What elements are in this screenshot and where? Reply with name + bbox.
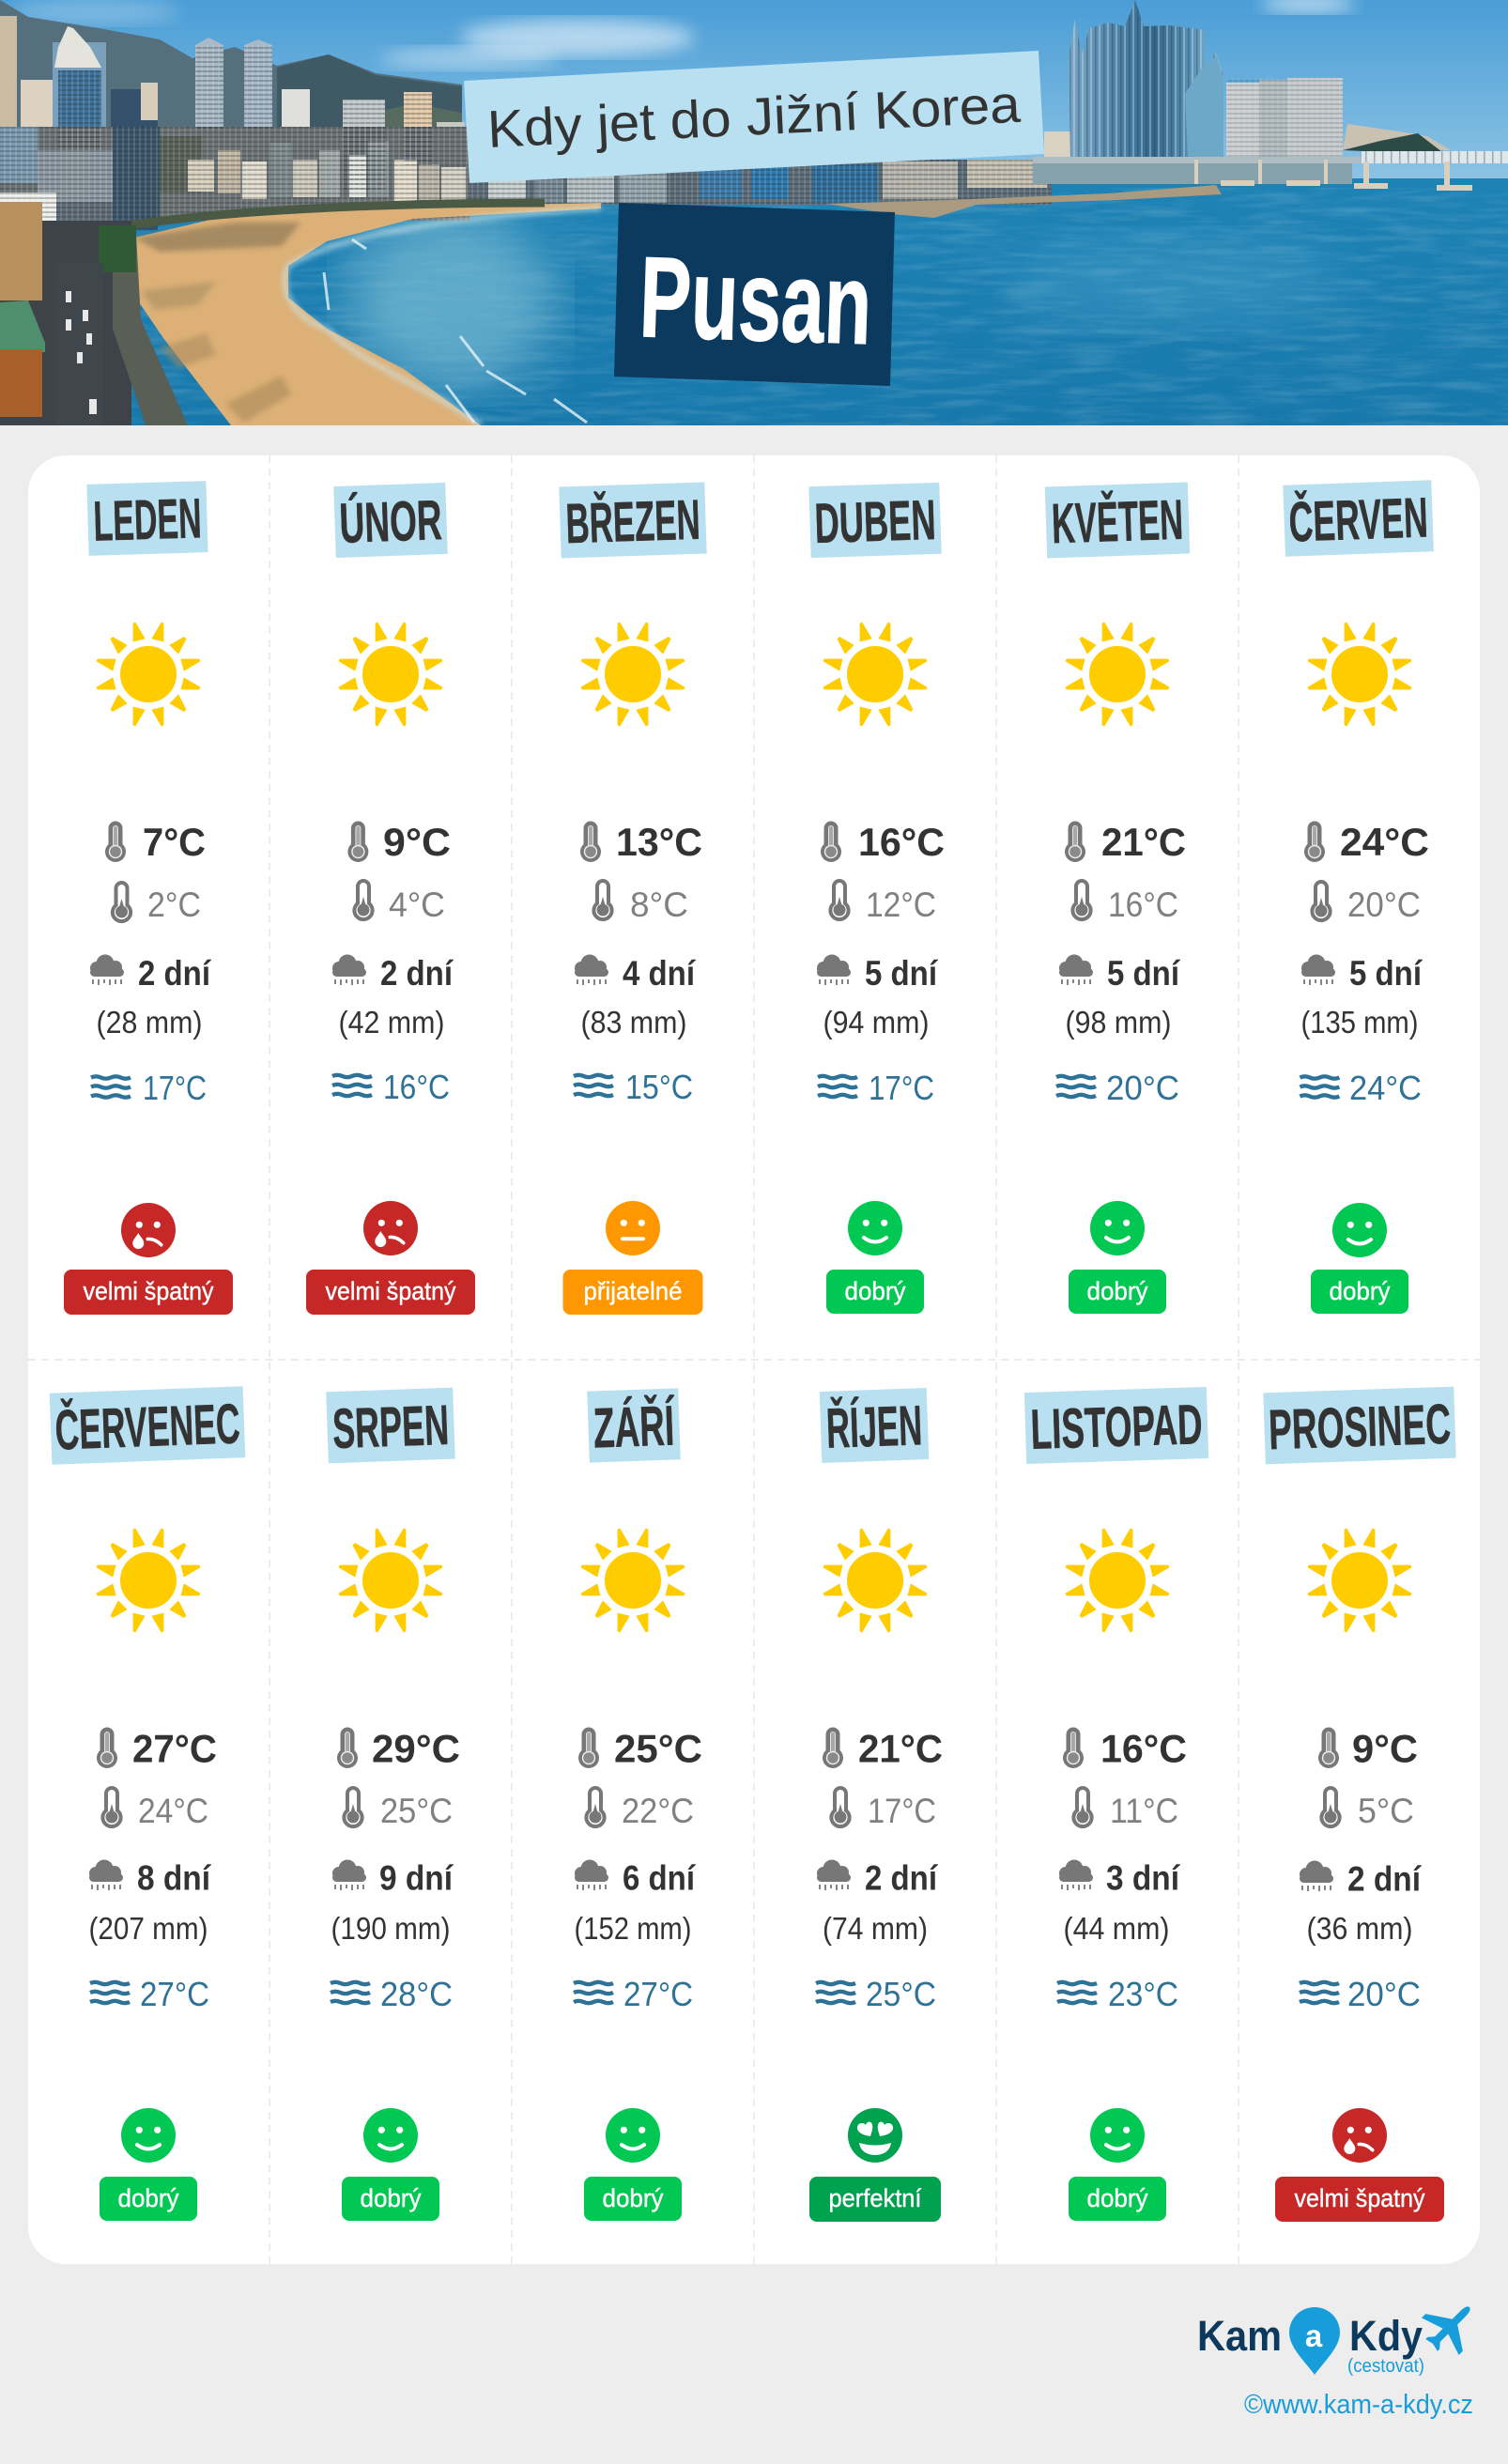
month: listopad	[1024, 1387, 1208, 2221]
icon: sun	[1308, 623, 1411, 726]
max temperature	[97, 1726, 217, 1771]
icon: rating face	[848, 2108, 902, 2163]
rating badge	[809, 2177, 941, 2222]
sea temperature	[331, 1975, 453, 2013]
min temperature: 11°C	[1110, 1792, 1178, 1830]
min temperature: 22°C	[622, 1792, 694, 1830]
min temperature	[586, 1788, 694, 1830]
rating badge: velmi špatný	[1294, 2184, 1425, 2212]
sea temperature	[818, 1069, 934, 1107]
rainy days	[1301, 954, 1423, 993]
subtitle ribbon: Kdy jet do Jižní Korea	[486, 74, 1023, 159]
max temperature: 29°C	[372, 1726, 460, 1771]
sea temperature: 20°C	[1347, 1975, 1421, 2013]
rainy days	[1059, 954, 1181, 993]
website credit: ©www.kam-a-kdy.cz	[1244, 2390, 1473, 2420]
month: únor	[306, 483, 475, 1315]
rating badge	[563, 1270, 702, 1315]
month label: BŘEZEN	[565, 488, 701, 555]
max temperature	[821, 820, 945, 864]
month label: ČERVENEC	[54, 1392, 241, 1462]
logo word Kdy: Kdy	[1349, 2312, 1423, 2360]
max temperature	[1063, 1726, 1187, 1771]
max temperature	[1065, 820, 1186, 864]
logo tagline: (cestovat)	[1347, 2356, 1424, 2377]
min temperature: 17°C	[868, 1792, 936, 1830]
month label: ZÁŘÍ	[592, 1394, 676, 1459]
rainfall: (74 mm)	[823, 1911, 928, 1946]
icon: sun	[581, 623, 685, 726]
sea temperature	[816, 1975, 936, 2013]
min temperature	[344, 1788, 453, 1830]
rating badge	[306, 1270, 475, 1315]
min temperature	[593, 881, 688, 924]
sea temperature	[574, 1975, 693, 2013]
icon: sun	[823, 1529, 927, 1632]
min temperature	[1072, 881, 1178, 924]
min temperature	[354, 881, 445, 924]
icon: rating face	[606, 2108, 660, 2163]
rating badge: dobrý	[361, 2184, 422, 2212]
rainy days	[332, 954, 454, 993]
rating badge	[1069, 2177, 1166, 2221]
rainy days: 9 dní	[379, 1859, 454, 1897]
icon: rating face	[121, 2108, 176, 2163]
rainy days	[1059, 1859, 1181, 1897]
month label	[1024, 1387, 1208, 1464]
sea temperature: 25°C	[866, 1975, 936, 2013]
rating badge	[1311, 1270, 1408, 1314]
rainy days	[332, 1859, 454, 1897]
max temperature: 16°C	[1100, 1726, 1187, 1771]
month: květen	[1045, 483, 1190, 1314]
rating badge: dobrý	[1087, 1277, 1148, 1305]
min temperature	[113, 883, 201, 924]
month label	[1045, 483, 1190, 558]
icon: rating face	[606, 1201, 660, 1255]
max temperature: 25°C	[614, 1726, 702, 1771]
month label	[50, 1386, 245, 1465]
min temperature	[830, 881, 936, 924]
logo: Kam a Kdy	[1197, 2288, 1488, 2377]
rainy days: 5 dní	[1349, 954, 1423, 993]
rating badge: dobrý	[118, 2184, 179, 2212]
sea temperature	[574, 1068, 693, 1106]
max temperature	[105, 820, 206, 864]
rating badge: perfektní	[828, 2184, 922, 2212]
min temperature: 16°C	[1108, 886, 1178, 924]
icon: rating face	[121, 1203, 176, 1257]
rainy days: 8 dní	[137, 1859, 212, 1897]
subtitle ribbon	[464, 51, 1044, 183]
max temperature: 21°C	[1101, 820, 1186, 864]
max temperature: 24°C	[1340, 820, 1429, 864]
rating badge: velmi špatný	[83, 1277, 214, 1305]
max temperature: 9°C	[383, 820, 451, 864]
icon: rating face	[848, 1201, 902, 1255]
min temperature	[1312, 882, 1421, 924]
rating badge	[342, 2177, 439, 2221]
rating badge	[584, 2177, 682, 2221]
min temperature	[102, 1788, 208, 1830]
month: březen	[559, 483, 707, 1315]
rainy days: 5 dní	[865, 954, 939, 993]
month label: LEDEN	[93, 486, 203, 553]
max temperature: 21°C	[858, 1726, 943, 1771]
sea temperature: 27°C	[623, 1975, 693, 2013]
max temperature: 16°C	[858, 820, 945, 864]
rating badge: dobrý	[1330, 1277, 1391, 1305]
sea temperature: 17°C	[869, 1069, 934, 1107]
icon: sun	[97, 623, 200, 726]
rainy days	[575, 954, 697, 993]
sea temperature: 28°C	[380, 1975, 453, 2013]
min temperature: 25°C	[380, 1792, 453, 1830]
rating badge	[64, 1270, 233, 1315]
icon: sun	[581, 1529, 685, 1632]
hero photo: Busan beach and skyline	[0, 0, 1508, 425]
month label	[820, 1388, 929, 1463]
min temperature: 4°C	[389, 886, 445, 924]
rainfall: (44 mm)	[1063, 1911, 1170, 1946]
month: září	[574, 1388, 702, 2221]
rating badge	[100, 2177, 197, 2221]
icon: map pin: a	[1305, 2318, 1323, 2353]
icon: sun	[1308, 1529, 1411, 1632]
rainy days	[817, 1859, 939, 1897]
icon: sun	[1066, 1529, 1169, 1632]
city title ribbon: Pusan	[638, 233, 874, 368]
rating badge: dobrý	[1087, 2184, 1148, 2212]
month: leden	[64, 481, 233, 1315]
rainy days	[1300, 1859, 1423, 1899]
icon: map pin	[1289, 2307, 1340, 2375]
max temperature: 7°C	[143, 820, 206, 864]
rating badge	[1275, 2177, 1444, 2222]
min temperature: 20°C	[1347, 886, 1421, 924]
sea temperature	[1300, 1975, 1421, 2013]
icon: sun	[97, 1529, 200, 1632]
month label: KVĚTEN	[1051, 488, 1184, 555]
rainy days: 3 dní	[1106, 1859, 1181, 1897]
rating badge: velmi špatný	[325, 1277, 456, 1305]
rainy days: 2 dní	[1347, 1859, 1423, 1899]
icon: rating face	[363, 2108, 418, 2163]
rating badge: dobrý	[845, 1277, 906, 1305]
month: duben	[808, 483, 945, 1314]
rainfall: (190 mm)	[331, 1911, 451, 1946]
month label: LISTOPAD	[1030, 1393, 1204, 1461]
icon: sun	[823, 623, 927, 726]
rainfall: (135 mm)	[1301, 1005, 1418, 1040]
icon: rating face	[1332, 2108, 1387, 2163]
min temperature: 24°C	[138, 1792, 208, 1830]
month label	[1283, 480, 1434, 557]
rainfall: (83 mm)	[580, 1005, 687, 1040]
month: srpen	[326, 1388, 460, 2221]
sea temperature: 24°C	[1349, 1069, 1422, 1107]
rainfall: (42 mm)	[338, 1005, 445, 1040]
min temperature: 8°C	[630, 886, 688, 924]
rating badge: dobrý	[603, 2184, 664, 2212]
sea temperature: 20°C	[1106, 1069, 1179, 1107]
rainy days	[89, 1859, 212, 1897]
month: prosinec	[1263, 1387, 1456, 2222]
sea temperature	[90, 1975, 209, 2013]
month label	[333, 483, 448, 558]
sea temperature	[1057, 1975, 1178, 2013]
icon: sun	[1066, 623, 1169, 726]
min temperature	[1321, 1788, 1414, 1830]
sea temperature: 23°C	[1108, 1975, 1178, 2013]
rainy days	[575, 1859, 697, 1897]
month label	[587, 1388, 681, 1463]
rating badge	[826, 1270, 924, 1314]
month: červen	[1283, 480, 1434, 1314]
rainy days: 2 dní	[380, 954, 454, 993]
sea temperature	[1056, 1069, 1179, 1107]
icon: rating face	[363, 1201, 418, 1255]
sea temperature: 17°C	[143, 1069, 207, 1107]
month label	[86, 481, 208, 556]
rainy days: 2 dní	[138, 954, 212, 993]
min temperature: 2°C	[147, 886, 201, 924]
sea temperature: 16°C	[383, 1068, 450, 1106]
month label	[326, 1388, 455, 1463]
icon: rating face	[1332, 1203, 1387, 1257]
rainfall: (152 mm)	[575, 1911, 691, 1946]
month label: ÚNOR	[338, 488, 443, 555]
rainy days	[817, 954, 939, 993]
max temperature: 27°C	[132, 1726, 217, 1771]
rating badge	[1069, 1270, 1166, 1314]
max temperature: 13°C	[616, 820, 702, 864]
min temperature	[1073, 1788, 1178, 1830]
rainfall: (98 mm)	[1065, 1005, 1172, 1040]
month label: SRPEN	[331, 1394, 450, 1460]
rainy days: 4 dní	[623, 954, 697, 993]
month label: ŘÍJEN	[825, 1394, 923, 1460]
logo word Kam: Kam	[1197, 2312, 1282, 2360]
min temperature	[831, 1788, 936, 1830]
sea temperature	[332, 1068, 450, 1106]
min temperature: 12°C	[866, 886, 936, 924]
icon: plane	[1413, 2288, 1488, 2364]
rainfall: (36 mm)	[1307, 1911, 1412, 1946]
month label: DUBEN	[814, 488, 937, 555]
city title ribbon	[614, 203, 895, 386]
panel: months card	[28, 455, 1480, 2264]
sea temperature: 15°C	[625, 1068, 693, 1106]
rainy days: 6 dní	[623, 1859, 697, 1897]
icon: rating face	[1090, 1201, 1145, 1255]
max temperature: 9°C	[1352, 1726, 1418, 1771]
rainfall: (94 mm)	[823, 1005, 930, 1040]
max temperature	[1318, 1726, 1418, 1771]
month label	[559, 483, 707, 558]
month label	[808, 483, 942, 558]
rainfall: (207 mm)	[88, 1911, 208, 1946]
month: červenec	[50, 1386, 245, 2221]
max temperature	[580, 820, 702, 864]
rainy days: 5 dní	[1107, 954, 1181, 993]
sea temperature: 27°C	[140, 1975, 209, 2013]
rainy days	[90, 954, 212, 993]
rainy days: 2 dní	[865, 1859, 939, 1897]
max temperature	[823, 1726, 943, 1771]
sea temperature	[91, 1069, 207, 1107]
rainfall: (28 mm)	[96, 1005, 203, 1040]
sea temperature	[1300, 1069, 1422, 1107]
icon: rating face	[1090, 2108, 1145, 2163]
icon: sun	[339, 1529, 442, 1632]
max temperature	[347, 820, 451, 864]
min temperature: 5°C	[1358, 1792, 1414, 1830]
icon: sun	[339, 623, 442, 726]
rating badge: přijatelné	[584, 1277, 682, 1305]
month: říjen	[809, 1388, 943, 2222]
